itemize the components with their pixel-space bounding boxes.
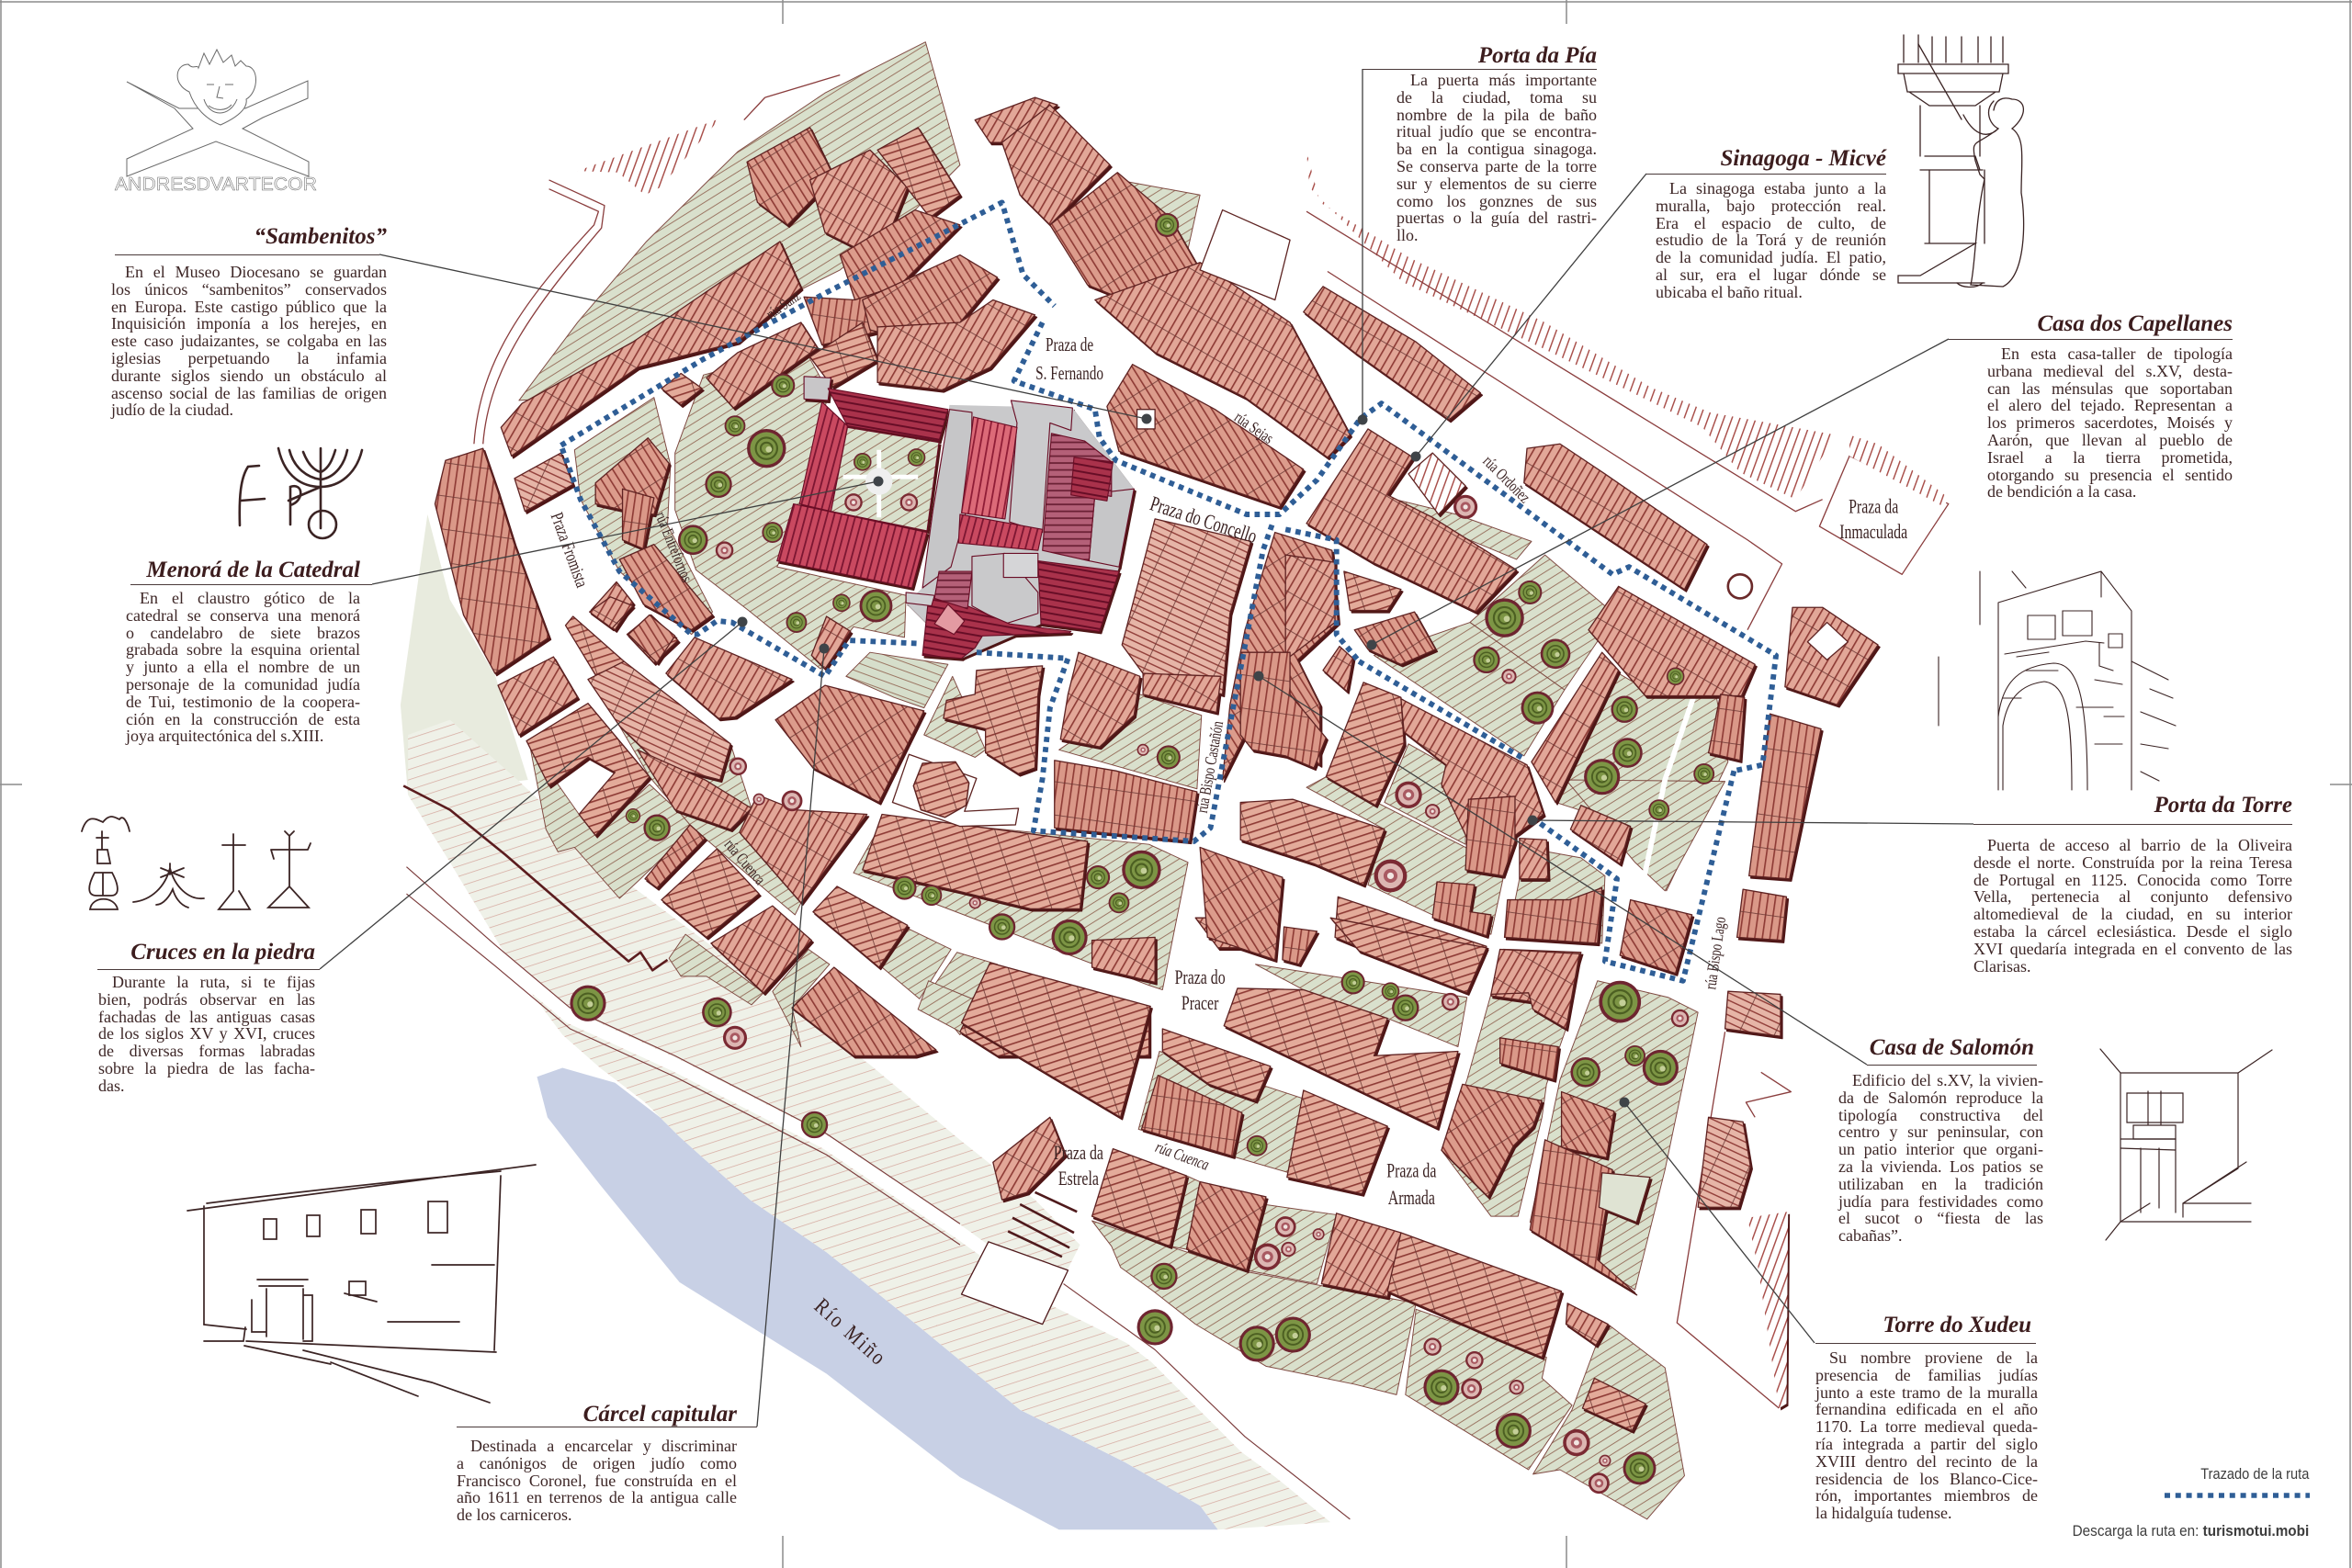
trees <box>570 213 1714 1494</box>
roofs: north and north-east <box>975 97 1878 1408</box>
text block: Porta da Torre: altomedieval de la ciudad, en su interior <box>1973 905 2292 923</box>
text block: Capellanes: el alero del tejado. Representan a <box>1987 396 2233 414</box>
text block: Porta da Torre: Puerta de acceso al barrio de la Oliveira <box>1987 836 2292 854</box>
callout: Cruces en la piedra <box>97 940 320 1095</box>
text block: Menorá: personaje de la comunidad judía <box>126 675 360 694</box>
label: rúa Bispo Castañón: rúa Bispo Castañón <box>1193 719 1227 815</box>
outer wall road and northern hatching <box>474 75 1949 1408</box>
street labels <box>547 288 1908 1371</box>
text block: Cárcel <box>457 1437 737 1524</box>
text block: Xudeu <box>1815 1348 2038 1522</box>
label: Río Miño: Río Miño <box>809 1293 892 1371</box>
text block: Salomón: un patio interior que organi- <box>1838 1140 2043 1158</box>
text block: Sinagoga: al sur, era el lugar dónde se <box>1656 265 1886 284</box>
text block: Salomón <box>1838 1071 2043 1245</box>
text block: Cruces <box>98 973 315 1095</box>
drawing: Cárcel capitular facade <box>187 1165 536 1403</box>
callout: Casa dos Capellanes <box>1949 311 2233 501</box>
text block: Capellanes: de bendición a la casa. <box>1987 482 2136 501</box>
heading: Sinagoga - Micvé: Sinagoga - Micvé <box>1720 146 1886 171</box>
text block: Sinagoga <box>1656 179 1886 301</box>
text block: Xudeu: ría integrada a partir del siglo <box>1815 1435 2038 1453</box>
text block: Menorá: joya arquitectónica del s.XIII. <box>126 727 323 745</box>
river Miño <box>537 1067 1218 1529</box>
text block: Porta da Pía: llo. <box>1396 226 1419 244</box>
walking route <box>561 202 1776 981</box>
text block: Sambenitos: Inquisición imponía a los herejes, en <box>111 314 387 333</box>
label: Praza da Estrela: Praza da <box>1054 1143 1103 1165</box>
gardens <box>519 42 1728 1519</box>
callout: Casa de Salomón <box>1838 1035 2043 1245</box>
callout: Torre do Xudeu <box>1815 1313 2038 1522</box>
drawing: Porta da Torre <box>1939 571 2176 790</box>
text block: Porta da Torre: desde el norte. Construída por la reina Teresa <box>1973 853 2292 872</box>
text block: Porta da Torre: de Portugal en 1125. Conocida como Torre <box>1973 871 2292 889</box>
text block: Xudeu: XVIII dentro del recinto de la <box>1815 1452 2038 1471</box>
text block: Porta da Pía: ba en la contigua sinagoga. <box>1396 140 1597 158</box>
label: Praza da Armada: Armada <box>1388 1188 1435 1210</box>
roofs: centre and east <box>962 519 1692 1431</box>
heading: Cruces en la piedra: Cruces en la piedra <box>130 940 315 964</box>
text block: Salomón: el sucot o “fiesta de las <box>1838 1209 2043 1227</box>
text block: Sambenitos: durante siglos siendo un obstáculo al <box>111 367 387 385</box>
text block: Sinagoga: ubicaba el baño ritual. <box>1656 283 1803 301</box>
text block: Menorá <box>125 589 360 745</box>
text block: Sinagoga: estudio de la Torá y de reunión <box>1656 231 1886 249</box>
text block: Menorá: grabada sobre la esquina oriental <box>126 640 360 659</box>
heading: Cárcel capitular: Cárcel capitular <box>583 1402 737 1427</box>
text block: Menorá: ción en la construcción de esta <box>126 710 360 728</box>
legend: download link: Descarga la ruta en: turismotui.mobi <box>2072 1522 2309 1540</box>
label: Praza do Pracer: Praza do <box>1175 967 1226 989</box>
legend line: route sample <box>2165 1493 2310 1498</box>
text block: Cruces: de diversas formas labradas <box>98 1042 315 1060</box>
text block: Menorá: o candelabro de siete brazos <box>126 624 360 642</box>
text block: Porta da Pía <box>1396 71 1597 244</box>
label: rúa Ordoñez: rúa Ordoñez <box>1479 452 1533 507</box>
text block: Cruces: das. <box>98 1077 125 1095</box>
text block: Sinagoga: La sinagoga estaba junto a la <box>1669 179 1886 197</box>
text block: Salomón: cabañas”. <box>1838 1226 1902 1245</box>
label: Praza de S. Fernando: Praza de <box>1046 334 1093 355</box>
cloister paths <box>843 450 918 517</box>
label: Praza da Estrela: Estrela <box>1058 1168 1099 1190</box>
text block: Sambenitos: en Europa. Este castigo público que la <box>111 298 387 316</box>
label: rúa Cuenca south: rúa Cuenca <box>1153 1138 1212 1174</box>
icon: menorah graffiti <box>240 448 362 538</box>
label: Praza do Pracer: Pracer <box>1182 992 1219 1015</box>
fountain <box>1728 574 1752 598</box>
text block: Sambenitos: En el Museo Diocesano se guardan <box>125 263 387 281</box>
text block: Capellanes: Aarón, que llevan al pueblo de <box>1987 431 2233 449</box>
text block: Cruces: bien, podrás observar en las <box>98 990 315 1009</box>
label: Praza da Inmaculada: Inmaculada <box>1839 522 1908 544</box>
text block: Porta da Pía: como los gonznes de sus <box>1396 192 1597 210</box>
callout: Porta da Torre <box>1973 793 2292 976</box>
text block: Menorá: En el claustro gótico de la <box>140 589 360 607</box>
legend: route trace label: Trazado de la ruta <box>2200 1465 2309 1483</box>
cathedral <box>777 377 1134 659</box>
label: rúa Cuenca north: rúa Cuenca <box>720 836 769 888</box>
text block: Xudeu: presencia de familias judías <box>1815 1366 2038 1384</box>
text block: Porta da Pía: nombre de la pila de baño <box>1396 106 1597 124</box>
text block: Sinagoga: muralla, bajo protección real. <box>1656 197 1886 215</box>
callout: Sambenitos <box>110 224 387 419</box>
text block: Sambenitos <box>110 263 387 419</box>
text block: Sambenitos: iglesias perpetuando la infamia <box>111 349 387 367</box>
text block: Porta da Pía: sur y elementos de su cierre <box>1396 175 1597 193</box>
riverside road <box>403 786 1350 1519</box>
callout: Cárcel capitular <box>457 1402 757 1524</box>
rotunda <box>913 761 969 818</box>
text block: Sambenitos: judío de la ciudad. <box>111 400 233 419</box>
text block: Capellanes: los primeros sacerdotes, Moisés y <box>1987 413 2233 432</box>
drawing: Casa de Salomón patio <box>2100 1049 2272 1240</box>
text block: Xudeu: rón, importantes miembros de <box>1815 1486 2038 1505</box>
text block: Cárcel: de los carniceros. <box>457 1506 571 1524</box>
text block: Cruces: de los siglos XV y XVI, cruces <box>98 1024 315 1043</box>
text block: Salomón: Edificio del s.XV, la vivien- <box>1852 1071 2043 1089</box>
text block: Capellanes <box>1987 344 2233 501</box>
text block: Sambenitos: este caso judaizantes, se colgaba en las <box>111 332 387 350</box>
text block: Porta da Pía: Se conserva parte de la torre <box>1396 157 1597 175</box>
text block: Porta da Pía: de la ciudad, toma su <box>1396 88 1597 107</box>
text block: Porta da Pía: ritual judío que se encontra- <box>1396 122 1597 141</box>
leader lines and location dots <box>320 69 1973 1427</box>
label: rúa Entrefornos: rúa Entrefornos <box>651 510 695 585</box>
text block: Capellanes: otorgando su presencia el sentido <box>1987 466 2233 484</box>
label: Praza da Inmaculada: Praza da <box>1849 496 1899 518</box>
heading: Sambenitos: “Sambenitos” <box>254 224 387 249</box>
text block: Sambenitos: ascenso social de las familias de origen <box>111 384 387 402</box>
icon: Andrés Duarte Coro logo <box>115 50 317 195</box>
white courtyards <box>892 210 1290 827</box>
text block: Cruces: sobre la piedra de las facha- <box>98 1059 315 1077</box>
text block: Menorá: y junto a ella el nombre de un <box>126 658 360 676</box>
text block: Xudeu: fernandina edificada en el año <box>1815 1400 2038 1418</box>
text block: Cárcel: Francisco Coronel, fue construída en el <box>457 1472 737 1490</box>
text block: Xudeu: junto a este tramo de la muralla <box>1815 1383 2038 1402</box>
riverside ground <box>408 720 1330 1529</box>
map of the old town of Tui <box>401 42 1949 1529</box>
callout: Porta da Pía <box>1363 43 1597 244</box>
text block: Capellanes: Israel a la tierra prometida, <box>1987 448 2233 467</box>
river bank wash <box>401 514 528 795</box>
text block: Sinagoga: Era el espacio de culto, de <box>1656 214 1886 232</box>
heading: Torre do Xudeu: Torre do Xudeu <box>1883 1313 2031 1337</box>
text block: Cárcel: año 1611 en terrenos de la antigua calle <box>457 1488 737 1506</box>
icon: stone crosses <box>82 817 311 909</box>
callout: Sinagoga - Micvé <box>1646 146 1887 301</box>
text block: Salomón: za la vivienda. Los patios se <box>1838 1157 2043 1176</box>
text block: Porta da Torre: Vella, pertenecia al conjunto defensivo <box>1973 887 2292 906</box>
text block: Cárcel: a canónigos de origen judío como <box>457 1454 737 1472</box>
heading: Casa de Salomón: Casa de Salomón <box>1870 1035 2034 1060</box>
label: Praza da Armada: Praza da <box>1386 1160 1437 1182</box>
text block: Salomón: utilizaban en la tradición <box>1838 1175 2043 1193</box>
text block: Porta da Torre: Clarisas. <box>1973 957 2030 976</box>
text block: Salomón: centro y sur peninsular, con <box>1838 1122 2043 1141</box>
stairs near Praza da Estrela <box>962 1192 1077 1325</box>
text block: Salomón: tipología constructiva del <box>1838 1106 2043 1124</box>
roofs: north-west quarter <box>435 128 1155 1055</box>
text block: Xudeu: residencia de los Blanco-Cice- <box>1815 1470 2038 1488</box>
heading: Menorá de la Catedral: Menorá de la Catedral <box>146 558 360 582</box>
text block: Cruces: fachadas de las antiguas casas <box>98 1008 315 1026</box>
text block: Sinagoga: de la comunidad judía. El patio, <box>1656 248 1886 266</box>
label: Praza de S. Fernando: S. Fernando <box>1035 363 1103 384</box>
text block: Capellanes: En esta casa-taller de tipología <box>2001 344 2233 363</box>
text block: Porta da Pía: La puerta más importante <box>1410 71 1597 89</box>
text block: Cárcel: Destinada a encarcelar y discriminar <box>470 1437 737 1455</box>
text block: Sambenitos: los únicos “sambenitos” conservados <box>111 280 387 299</box>
text block: Xudeu: la hidalguía tudense. <box>1815 1504 1951 1522</box>
text block: Capellanes: can las ménsulas que soportaban <box>1987 379 2233 398</box>
label: Praza Fromista: Praza Fromista <box>547 510 593 591</box>
label: rúa Sejas: rúa Sejas <box>1231 409 1276 447</box>
label: rúa Sanz: rúa Sanz <box>763 288 804 323</box>
text block: Salomón: judía para festividades como <box>1838 1192 2043 1211</box>
text block: Menorá: catedral se conserva una menorá <box>126 606 360 625</box>
drawing: man lighting menorah <box>1898 35 2024 288</box>
heading: Porta da Pía: Porta da Pía <box>1478 43 1597 68</box>
text block: Porta da Torre: estaba la cárcel eclesiástica. Desde el siglo <box>1973 922 2292 941</box>
heading: Porta da Torre: Porta da Torre <box>2154 793 2292 818</box>
text block: Menorá: de Tui, testimonio de la coopera- <box>126 693 360 711</box>
label: rúa Bispo Lago: rúa Bispo Lago <box>1702 916 1730 990</box>
heading: Casa dos Capellanes: Casa dos Capellanes <box>2037 311 2233 336</box>
text block: Porta da Torre <box>1973 836 2292 976</box>
text block: Salomón: da de Salomón reproduce la <box>1838 1089 2043 1107</box>
label: Praza do Concello: Praza do Concello <box>1148 492 1260 548</box>
text block: Porta da Torre: XVI quedaría integrada en el convento de las <box>1973 940 2292 958</box>
icon: Andrés Duarte Coro logo: ANDRESDVARTECOR <box>115 175 317 195</box>
text block: Xudeu: Su nombre proviene de la <box>1829 1348 2038 1367</box>
callout: Menorá de la Catedral <box>125 558 372 745</box>
text block: Xudeu: 1170. La torre medieval queda- <box>1815 1417 2038 1436</box>
text block: Capellanes: urbana medieval del s.XV, desta- <box>1987 362 2233 380</box>
route corridor and inner path <box>1643 682 1695 885</box>
text block: Cruces: Durante la ruta, si te fijas <box>112 973 315 991</box>
text block: Porta da Pía: puertas o la guía del rastri- <box>1396 209 1597 227</box>
